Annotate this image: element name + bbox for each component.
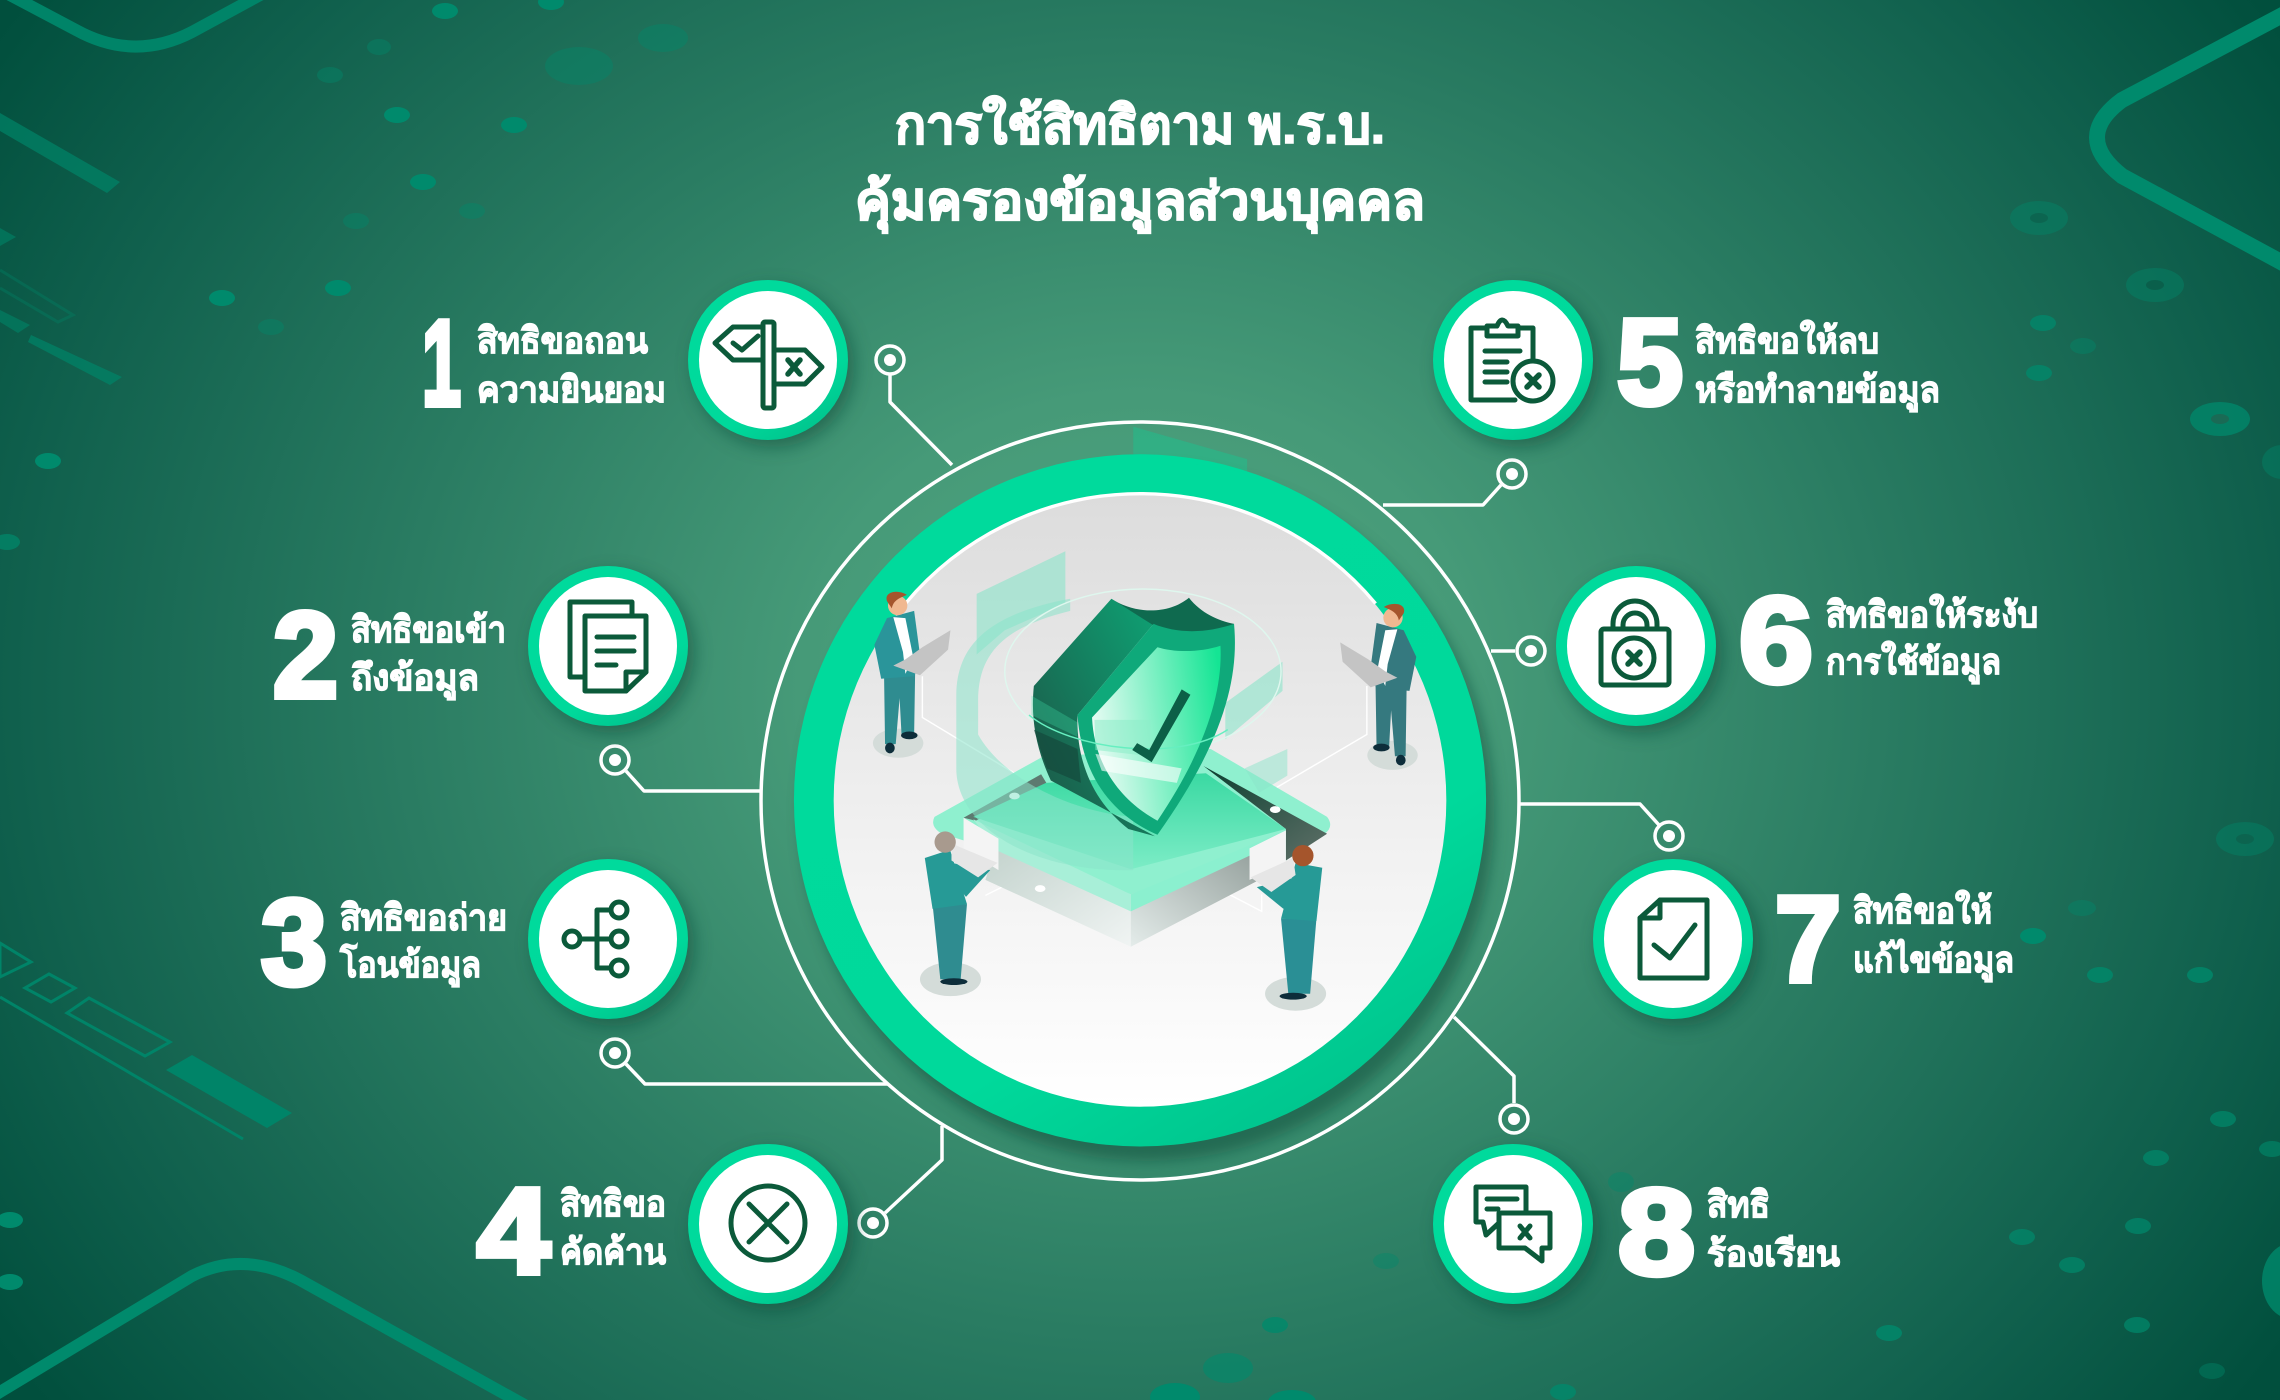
icon: branch nodes: [564, 902, 627, 976]
platform top: [973, 773, 1286, 869]
label: สิทธิขอถ่าย: [340, 897, 507, 938]
badge: [1593, 859, 1759, 1026]
right 1: consent withdrawal: [422, 280, 854, 447]
faded ring highlight: [1133, 427, 1247, 473]
label: [339, 897, 507, 988]
platform plate: [933, 749, 1330, 904]
label: สิทธิขอถอน: [477, 320, 648, 361]
label: สิทธิ: [1707, 1184, 1770, 1225]
number: 2: [273, 587, 338, 723]
right 7: rectification: [1593, 859, 2014, 1026]
label: ถึงข้อมูล: [351, 657, 479, 701]
white disc: [834, 494, 1446, 1107]
icon: cross in circle: [731, 1186, 805, 1260]
person top left: [873, 592, 950, 758]
label: ความยินยอม: [477, 369, 666, 410]
person top right: [1340, 604, 1418, 770]
label: แก้ไขข้อมูล: [1853, 938, 2014, 983]
badge: [1433, 1144, 1599, 1311]
connector lines and ring: [601, 346, 1683, 1237]
label: [1695, 319, 1940, 413]
platform dots: [1009, 793, 1281, 892]
number: 7: [1775, 871, 1841, 1007]
label: [560, 1183, 666, 1272]
badge: [528, 859, 694, 1026]
title: การใช้สิทธิตาม พ.ร.บ.: [895, 95, 1385, 155]
label: สิทธิขอให้ลบ: [1695, 319, 1879, 361]
label: คัดค้าน: [560, 1231, 666, 1272]
label: [1826, 593, 2038, 685]
badge: [528, 566, 694, 733]
person bottom right: [1251, 845, 1326, 1011]
label: สิทธิขอให้: [1853, 889, 1992, 931]
right 6: restriction: [1556, 566, 2038, 733]
icon: signpost: [715, 322, 822, 408]
badge: [1556, 566, 1722, 733]
title: คุ้มครองข้อมูลส่วนบุคคล: [855, 173, 1425, 234]
badge: [688, 280, 854, 447]
right 2: data access: [273, 566, 694, 733]
title: [855, 95, 1425, 234]
label: สิทธิขอ: [560, 1183, 666, 1224]
icon: chat bubbles: [1476, 1187, 1550, 1261]
number: 4: [477, 1163, 550, 1299]
number: 1: [422, 295, 461, 431]
number: 6: [1739, 572, 1813, 708]
right 5: erasure: [1433, 280, 1940, 447]
central illustration: [794, 427, 1494, 1161]
label: หรือทำลายข้อมูล: [1695, 369, 1940, 413]
shield: [1029, 598, 1235, 836]
icon: documents: [570, 602, 646, 691]
badge: [688, 1144, 854, 1311]
person bottom left: [920, 831, 998, 996]
platform cube: [985, 844, 1131, 947]
icon: padlock: [1601, 601, 1669, 685]
badge: [1433, 280, 1599, 447]
swirl ribbons: [956, 551, 1287, 870]
thin circuit lines: [922, 676, 1367, 911]
number: 8: [1618, 1164, 1695, 1300]
label: [351, 609, 506, 701]
number: 5: [1617, 294, 1683, 430]
label: สิทธิขอเข้า: [351, 609, 506, 650]
label: ร้องเรียน: [1707, 1233, 1840, 1274]
label: [1853, 889, 2014, 983]
label: สิทธิขอให้ระงับ: [1826, 593, 2038, 635]
right 4: objection: [477, 1144, 854, 1311]
right 3: data transfer: [261, 859, 694, 1026]
label: การใช้ข้อมูล: [1826, 640, 2001, 685]
icon: document with check: [1640, 900, 1707, 978]
green ring: [794, 454, 1486, 1146]
ring shadow: [801, 468, 1494, 1161]
label: [1707, 1184, 1840, 1274]
number: 3: [261, 874, 327, 1010]
right 8: complaint: [1433, 1144, 1840, 1311]
label: [477, 320, 666, 410]
label: โอนข้อมูล: [339, 943, 481, 988]
icon: clipboard with cross: [1471, 320, 1553, 401]
